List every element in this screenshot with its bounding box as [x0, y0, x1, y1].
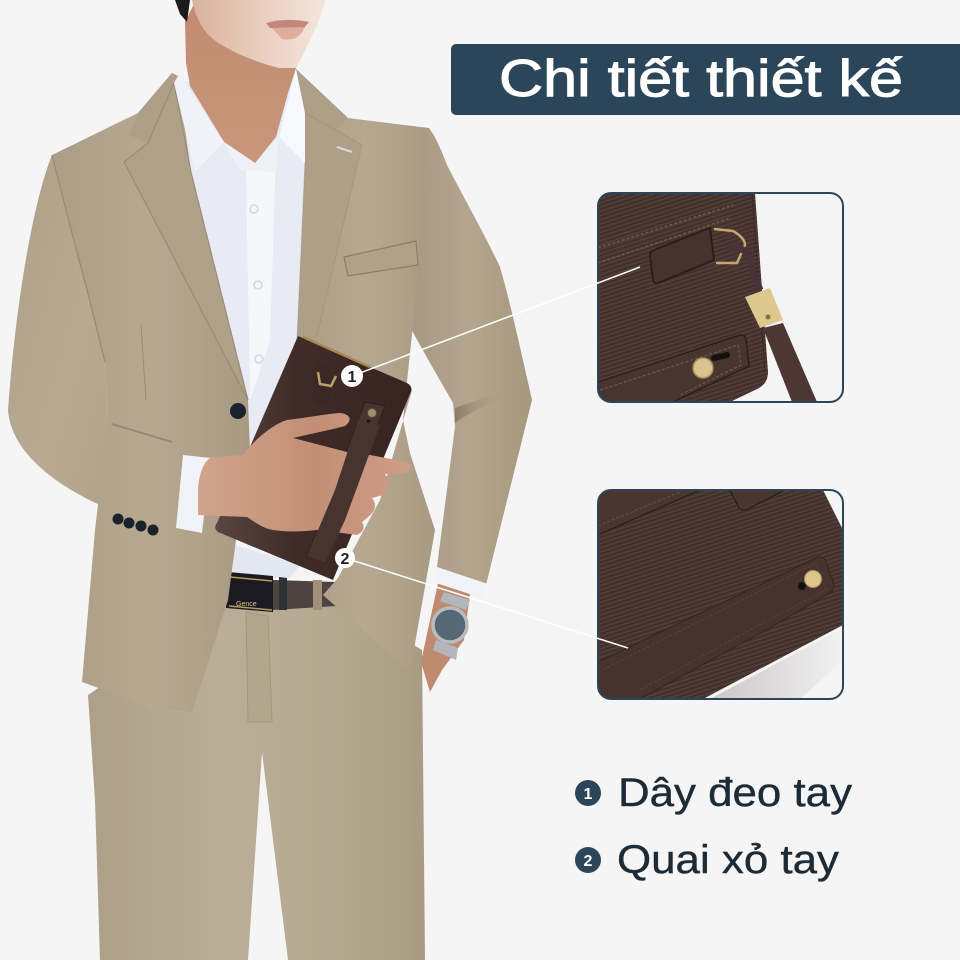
- sleeve buttons: [112, 514, 158, 536]
- right arm: [395, 128, 532, 585]
- watch: [433, 592, 470, 660]
- shirt cuff left: [176, 455, 211, 533]
- clutch bag: [215, 336, 411, 580]
- connector line 1: [352, 267, 640, 376]
- neck: [185, 0, 296, 163]
- breast pocket: [344, 241, 418, 276]
- belt: Gence: [236, 601, 257, 608]
- shirt: [174, 69, 305, 450]
- right jacket front: [296, 69, 435, 672]
- lips: [266, 20, 309, 28]
- shirt cuff right: [436, 567, 488, 598]
- lower shirt: [232, 545, 300, 578]
- face: [192, 0, 326, 68]
- model in beige suit: [8, 0, 532, 960]
- hand: [198, 413, 411, 535]
- bag strap over hand: [307, 420, 380, 563]
- left sleeve: [8, 155, 190, 532]
- title banner: Chi tiết thiết kế: [499, 50, 903, 108]
- legend item 2: Quai xỏ tay: [617, 838, 839, 882]
- right collar: [279, 69, 305, 163]
- trousers: [88, 600, 425, 960]
- legend item 1: Dây đeo tay: [618, 771, 852, 815]
- marker 1: [341, 365, 363, 387]
- panel: detail 2 hand strap: [598, 490, 843, 699]
- marker 1: 1: [348, 369, 357, 386]
- connector line 2: [345, 558, 628, 648]
- legend item 2: 2: [584, 853, 593, 870]
- hair: [175, 0, 190, 22]
- left collar: [174, 74, 224, 172]
- marker 2: 2: [341, 551, 350, 568]
- wrist and hand in pocket: [421, 583, 470, 692]
- panel: detail 1 wrist strap: [598, 193, 843, 402]
- jacket button: [230, 403, 246, 419]
- belt: [226, 572, 337, 612]
- left jacket front: [52, 73, 250, 712]
- title banner: [451, 44, 960, 115]
- legend item 1: 1: [584, 786, 593, 803]
- left lapel: [129, 73, 191, 172]
- right lapel: [296, 69, 348, 130]
- marker 2: [335, 548, 355, 568]
